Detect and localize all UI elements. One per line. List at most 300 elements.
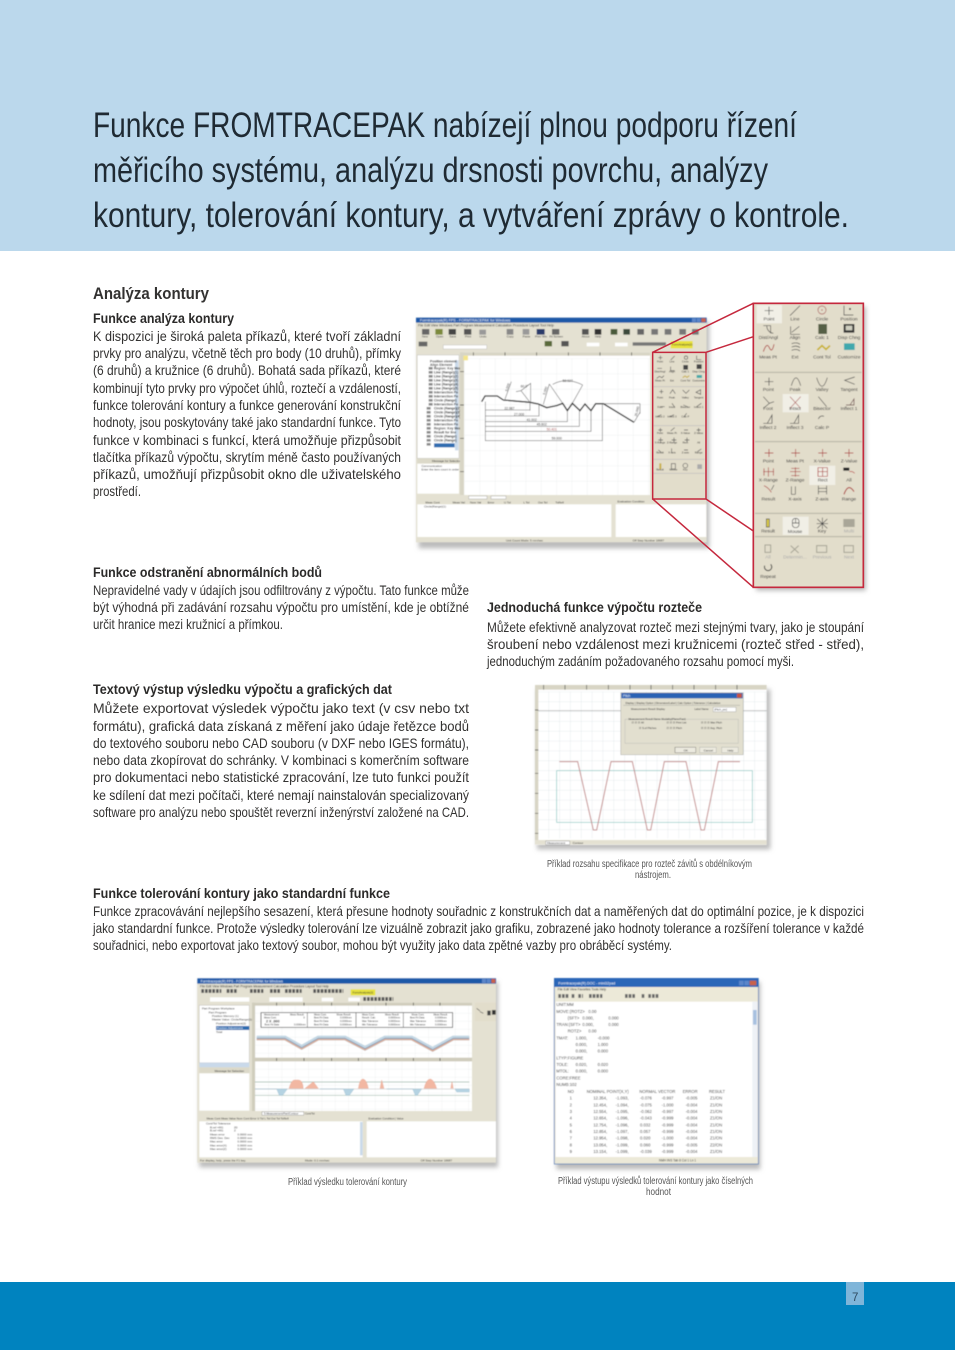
screenshot: contour analysis window: Result for line — [434, 430, 456, 434]
screenshot: contour analysis window: Range — [695, 451, 703, 455]
screenshot: contour analysis window: Print — [465, 335, 471, 339]
screenshot: tolerance result window: B.ref =RG — [210, 1125, 224, 1129]
screenshot: pitch graph with dialog: ☑ ☑ ☑ Print List — [667, 721, 687, 725]
title: měřicího systému, analýzu drsnosti povrchu, analýzy — [93, 151, 768, 190]
screenshot: pitch graph with dialog: Measurement Result Display — [631, 707, 666, 711]
numeric report: MOVE:(ROTZ> — [556, 1009, 585, 1014]
toolbox labels: Foot — [763, 406, 773, 412]
toolbox labels: Result — [761, 528, 775, 534]
numeric report: Z2/ON — [710, 1142, 722, 1147]
screenshot: text output notepad window: NMH INS Tab 8 Col 1 Ln 1 — [659, 1159, 696, 1163]
caption: výstup číselných hodnot — [558, 1175, 753, 1198]
numeric report: -1.097, — [616, 1129, 629, 1134]
screenshot: contour analysis window: Tangent — [694, 395, 704, 399]
text block: Textový výstup: do textového souboru nebo CAD souboru (v DXF nebo IGES formátu), — [93, 736, 469, 751]
numeric report: 6 — [570, 1129, 573, 1134]
screenshot: pitch graph with dialog: [Pitch_pm] — [714, 708, 727, 712]
toolbox labels: Customize — [838, 354, 861, 360]
numeric report: 1.000, — [576, 1035, 587, 1040]
numeric report: -0.999 — [662, 1142, 674, 1147]
toolbox labels: Meas Pt — [786, 458, 805, 464]
screenshot: contour analysis window: Align Element — [430, 363, 453, 367]
screenshot: contour analysis window: Off Step Number 16687 — [633, 538, 664, 542]
numeric report: TRAN:(SFT> — [556, 1022, 581, 1027]
numeric report: 12.854, — [593, 1129, 607, 1134]
numeric report: CORE:FREE — [556, 1075, 581, 1080]
screenshot: contour analysis window: 27.000 — [514, 412, 524, 416]
left tree — [417, 355, 459, 458]
toolbox labels: Rect — [818, 477, 828, 483]
text block: Textový výstup — [93, 682, 469, 820]
text block: Funkce tolerování kontury: Funkce tolerování kontury jako standardní funkce — [93, 886, 390, 901]
text block: Funkce odstranění abnormálních bodů — [93, 565, 469, 632]
screenshot: contour analysis window: Intersection Po — [434, 390, 458, 394]
toolbox labels: Position — [840, 316, 858, 322]
numeric report: TMAT: — [556, 1035, 568, 1040]
screenshot: contour analysis window: 22.987 — [504, 406, 515, 410]
screenshot: contour analysis window: Intsct — [669, 405, 675, 409]
screenshot: tolerance result window: Best Fit Data — [314, 1020, 329, 1023]
toolbox labels: Z-Value — [841, 458, 858, 464]
screenshot: tolerance result window: Max Tolerance — [410, 1020, 427, 1023]
numeric report: -0.004 — [686, 1109, 698, 1114]
text block: Textový výstup: pro dokumentaci nebo statistické zpracování, lze tuto funkci použít — [93, 770, 469, 785]
screenshot: tolerance result window: 0.0000mm — [340, 1020, 352, 1023]
toolbox labels: X-Range — [759, 477, 778, 483]
text block: Jednoduchá funkce výpočtu rozteče — [486, 600, 864, 669]
toolbox labels: Align — [790, 335, 801, 341]
screenshot: tolerance result window: 5-Measurement/Part/Contour — [264, 1112, 299, 1116]
screenshot: pitch graph with dialog: ☑ ☑ ☑ Pitch — [667, 726, 682, 730]
text block: Funkce analýza kontury: prostředí. — [93, 484, 141, 499]
screenshot: contour analysis window: Error — [488, 500, 494, 504]
numeric report: 5 — [570, 1122, 573, 1127]
numeric report: 0.00 — [588, 1009, 597, 1014]
text block: Textový výstup: Textový výstup výsledku výpočtu a grafických dat — [93, 682, 392, 697]
text block: Funkce analýza kontury: příkazů, umožňují přizpůsobit okno dle uživatelského — [93, 467, 401, 482]
screenshot: tolerance result window: Mean error — [210, 1132, 225, 1136]
numeric report: MTOL: — [556, 1069, 569, 1074]
screenshot: contour analysis window: Region: Key Mea — [434, 367, 461, 371]
toolbox labels: All — [846, 477, 852, 483]
screenshot: contour analysis window: Result — [656, 451, 664, 455]
screenshot: contour analysis window: Valley — [682, 395, 690, 399]
screenshot: tolerance result window: Message for Selection — [215, 1069, 245, 1073]
screenshot: contour analysis window: Region: Key Mea — [434, 426, 461, 430]
numeric report: 0.000 — [598, 1049, 609, 1054]
text block: Funkce analýza kontury: tlačítka příkazů výpočtu, skrytím méně často používaných — [93, 450, 401, 465]
numeric report: -1.000 — [662, 1102, 674, 1107]
screenshot: contour analysis window: Position — [694, 360, 704, 364]
numeric report: -0.043 — [640, 1116, 652, 1121]
screenshot: contour analysis window: L Tol — [523, 500, 530, 504]
group 4 icons — [766, 519, 769, 527]
toolbox labels: Point — [763, 316, 775, 322]
dialog — [621, 693, 743, 755]
text block: Funkce odstranění abnormálních bodů: Funkce odstranění abnormálních bodů — [93, 565, 322, 580]
header banner — [0, 0, 955, 251]
screenshot: contour analysis window: Line (Range)(5) — [434, 386, 458, 390]
screenshot: tolerance result window: Meas Result — [433, 1013, 447, 1016]
tab bar — [417, 495, 651, 500]
screenshot: tolerance result window: 0.0000mm — [388, 1017, 400, 1020]
numeric report: -1.095, — [616, 1109, 629, 1114]
screenshot: contour analysis window: Z-Range — [667, 441, 678, 445]
numeric report: 8 — [570, 1142, 573, 1147]
numeric report: -0.004 — [686, 1122, 698, 1127]
screenshot: contour analysis window: Out Tol — [538, 500, 548, 504]
screenshot: tolerance result window: 2 X .000 — [266, 1019, 280, 1023]
numeric report: Z1/ON — [710, 1122, 722, 1127]
screenshot: tolerance result window: 0.0000mm — [388, 1020, 400, 1023]
screenshot: contour analysis window: Message for Selection — [432, 459, 462, 463]
numeric report: 12.754, — [593, 1122, 607, 1127]
numeric report: Z1/ON — [710, 1102, 722, 1107]
screenshot: tolerance result window — [197, 978, 498, 1167]
screenshot: pitch graph with dialog: ☑ S.of Pitches — [639, 726, 657, 730]
screenshot: tolerance result window: 0.0000mm — [294, 1023, 306, 1026]
toolbox labels: Line — [790, 316, 800, 322]
screenshot: contour analysis window: 58.027 — [563, 379, 573, 383]
screenshot: tolerance result window: Cont/Tol Tolerance — [206, 1121, 231, 1125]
text block: Textový výstup: ke sdílení dat mezi počítači, které nemají nainstalován specializovaný — [93, 788, 469, 803]
screenshot: tolerance result window: Min Tolerance — [362, 1023, 378, 1026]
screenshot: tolerance result window: Evaluation Condition | Value — [368, 1117, 404, 1121]
numeric report: NOMINAL POINT(X,Y) — [587, 1089, 629, 1094]
title — [93, 106, 849, 235]
bottom list: Meas Cont Meas Value Nom Cont Error U Tol L Tol Out Tol ToRefl — [207, 1117, 289, 1121]
numeric report: Z1/ON — [710, 1129, 722, 1134]
screenshot: tolerance result window: Z — [234, 1129, 236, 1133]
screenshot: tolerance result window: B.ref =RG — [210, 1129, 224, 1133]
numeric report: -0.039 — [640, 1149, 652, 1154]
screenshot: contour analysis window: Circle (Range)(2) — [434, 406, 461, 410]
screenshot: tolerance result window: Result: Calc — [362, 1017, 376, 1020]
toolbox labels: Mouse — [788, 529, 803, 535]
toolbox labels: Point — [763, 387, 774, 393]
screenshot: contour analysis window: Intersection Po — [434, 418, 458, 422]
numeric report: 0.060 — [640, 1142, 651, 1147]
numeric report: 1.000 — [598, 1042, 609, 1047]
screenshot: contour analysis window: Line (Range)(4) — [434, 382, 458, 386]
numeric report: -0.004 — [686, 1136, 698, 1141]
screenshot: contour analysis window: Meas Val — [453, 500, 465, 504]
screenshot: tolerance result window: Position Adjustment(2) — [216, 1022, 246, 1026]
toolbox labels: Dist/Angl — [759, 335, 778, 341]
numeric report: 0.000, — [576, 1049, 587, 1054]
numeric report: -0.005 — [686, 1142, 698, 1147]
numeric report: 0.020 — [640, 1136, 651, 1141]
toolbox labels: Valley — [816, 387, 829, 393]
numeric report: ROTZ> — [568, 1029, 582, 1034]
screenshot: tolerance result window: Measurement — [264, 1013, 279, 1016]
screenshot: contour analysis window: FormAnalysis(2) — [672, 343, 693, 347]
screenshot: contour analysis window: Circle (Range)(3) — [434, 410, 461, 414]
toolbox labels: Determin... — [783, 555, 807, 561]
text block: Funkce analýza kontury: kombinují tyto prvky pro výpočet úhlů, roztečí a vzdáleností, — [93, 381, 401, 396]
page number — [846, 1282, 864, 1305]
caption: rozteč závitů: Příklad rozsahu specifikace pro rozteč závitů s obdélníkovým — [547, 858, 752, 870]
title: kontury, tolerování kontury, a vytváření zprávy o kontrole. — [93, 196, 849, 235]
toolbox labels: Intsct — [789, 406, 801, 412]
toolbox labels: Calc 1 — [815, 335, 829, 341]
text block: Funkce tolerování kontury — [92, 886, 864, 953]
screenshot: contour analysis window: Copy — [507, 335, 514, 339]
screenshot: contour analysis window: Enter the item count in order — [421, 467, 459, 471]
yellow status label — [671, 341, 693, 348]
screenshot: contour analysis window: Inflect 1 — [694, 405, 704, 409]
toolbox labels: Result — [761, 497, 776, 503]
screenshot: contour analysis window: Open — [436, 335, 444, 339]
screenshot: tolerance result window: 0.0000 mm — [237, 1132, 253, 1136]
screenshot: contour analysis window: Point — [657, 431, 663, 435]
numeric report: 0.000, — [582, 1022, 594, 1027]
screenshot: contour analysis window: Formtracepak(R) FPS - FORMTRACEPAK for Windows — [420, 318, 511, 322]
screenshot: text output notepad window: File Edit View Favorites Tools Help — [558, 988, 606, 992]
numeric report: -0.075 — [640, 1102, 652, 1107]
numeric report: NUMB:102 — [556, 1082, 577, 1087]
toolbox labels: Calc P — [815, 425, 829, 431]
caption: výstup číselných hodnot: Příklad výstupu výsledků tolerování kontury jako číselných — [558, 1175, 753, 1187]
screenshot: tolerance result window: 0.0000mm — [435, 1020, 447, 1023]
text block: Funkce analýza kontury: prvky pro analýzu, včetně těch pro body (10 druhů), přímky — [93, 346, 401, 361]
numeric report: -1.096, — [616, 1122, 629, 1127]
screenshot: pitch graph with dialog: Measurement — [547, 841, 565, 845]
numeric report — [556, 1002, 726, 1154]
screenshot: contour analysis window: Communication — [421, 464, 442, 468]
text block: Funkce odstranění abnormálních bodů: určit hranice mezi kružnicí a přímkou. — [93, 617, 283, 632]
numeric report: (SFT> — [568, 1015, 580, 1020]
screenshot: contour analysis window: 41.002 — [527, 418, 537, 422]
toolbox labels: Repeat — [760, 574, 776, 580]
toolbar — [419, 329, 699, 346]
screenshot: tolerance result window: Max error — [210, 1140, 223, 1144]
screenshot: contour analysis window: Customize — [692, 379, 705, 383]
screenshot: contour analysis window: Position element — [430, 359, 458, 363]
screenshot: contour analysis window: Z-Value — [694, 431, 704, 435]
screenshot: contour analysis window: Inflect 3 — [667, 415, 677, 419]
title: Funkce FROMTRACEPAK nabízejí plnou podporu řízení — [93, 106, 797, 145]
screenshot: tolerance result window: 0.0000mm — [340, 1017, 352, 1020]
screenshot: tolerance result window: Master Value: Circle/Range(1) — [212, 1018, 252, 1022]
group 2 icons — [763, 377, 855, 423]
numeric report: 0.032 — [640, 1122, 651, 1127]
numeric report: Z1/ON — [710, 1136, 722, 1141]
numeric report: 4 — [570, 1116, 573, 1121]
toolbox labels: Circle — [816, 316, 828, 322]
toolbox labels: Ext — [792, 354, 799, 360]
screenshot: contour analysis window: Align — [669, 369, 675, 373]
numeric report: -0.004 — [686, 1129, 698, 1134]
numeric report: -1.094, — [616, 1102, 629, 1107]
text block: Funkce analýza kontury: (6 druhů) a kružnice (6 druhů). Bohatá sada příkazů, které — [93, 363, 401, 378]
screenshot: contour analysis window: Inflect 2 — [655, 415, 665, 419]
screenshot: contour analysis window — [416, 318, 709, 548]
screenshot: tolerance result window: Part Program Workplace — [202, 1006, 235, 1010]
toolbox labels: Inflect 2 — [760, 425, 777, 431]
numeric report: Z1/ON — [710, 1116, 722, 1121]
screenshot: text output notepad window: Formtracepak(R).DOC - mini32pad — [558, 982, 615, 986]
screenshot: tolerance result window: Meas Result — [385, 1013, 399, 1016]
screenshot: pitch graph with dialog: ☑ ☑ ☑ Max Pitch — [701, 721, 723, 725]
screenshot: tolerance result window: Meas Cont. — [314, 1013, 327, 1016]
screenshot: tolerance result window: Best Fit Data — [314, 1017, 329, 1020]
caption: rozteč závitů: nástrojem. — [635, 870, 671, 881]
screenshot: pitch graph with dialog: ☑ ☑ ☑ Avg. Pitch — [701, 726, 723, 730]
screenshot: contour analysis window: Intersection Po — [434, 402, 458, 406]
screenshot: pitch graph with dialog: Label Name — [694, 707, 709, 711]
screenshot: contour analysis window: New — [422, 335, 429, 339]
screenshot: contour analysis window: Circle (Range)(4) — [434, 414, 461, 418]
numeric report: 12.354, — [593, 1096, 607, 1101]
toolbox labels: Previous — [813, 555, 832, 561]
screenshot: contour analysis window: Nom Val — [470, 500, 482, 504]
screenshot: tolerance result window: Mode: 0.1 mm/sec — [305, 1158, 330, 1162]
screenshot: pitch graph with dialog: Contour — [573, 841, 583, 845]
screenshot: contour analysis window: Peak — [669, 395, 676, 399]
screenshot: contour analysis window: Meas Cont — [425, 500, 440, 504]
panel: enlarged toolbox — [753, 303, 863, 587]
screenshot: tolerance result window: FormAnalysis(2) — [353, 991, 373, 995]
numeric report: 13.154, — [593, 1149, 607, 1154]
results table — [261, 1013, 453, 1027]
numeric report: 2 — [570, 1102, 573, 1107]
screenshot: contour analysis window: Ext — [670, 379, 674, 383]
toolbox labels: Cont Tol — [813, 354, 831, 360]
numeric report: -0.999 — [662, 1122, 674, 1127]
screenshot: tolerance result window: Meas Result — [337, 1013, 351, 1016]
canvas — [460, 352, 650, 495]
screenshot: tolerance result window: Z0 — [234, 1125, 238, 1129]
text block: Funkce analýza kontury: Funkce analýza kontury — [93, 311, 234, 326]
screenshot: contour analysis window: Prev Win — [535, 335, 547, 339]
numeric report: -0.999 — [662, 1129, 674, 1134]
screenshot: contour analysis window: Circle — [682, 360, 689, 364]
section heading: Analýza kontury: Analýza kontury — [93, 284, 209, 303]
group 5 icons — [765, 545, 853, 553]
numeric report: -0.000 — [598, 1035, 610, 1040]
screenshot: pitch graph with dialog: Pitch — [623, 694, 631, 698]
toolbox labels: Peak — [789, 387, 801, 393]
screenshot: tolerance result window: Best Fit Data — [410, 1017, 425, 1020]
error graph — [255, 1082, 469, 1095]
screenshot: tolerance result window: 0.0000mm — [340, 1023, 352, 1026]
screenshot: contour analysis window: Calc 1 — [682, 369, 690, 373]
screenshot: tolerance result window: 0.0000mm — [435, 1023, 447, 1026]
screenshot: tolerance result window: Max Tolerance — [362, 1020, 379, 1023]
screenshot: contour analysis window: Point — [657, 360, 663, 364]
screenshot: contour analysis window: Result — [656, 467, 664, 471]
footer band — [0, 1282, 955, 1350]
toolbox labels: Z-axis — [815, 497, 829, 503]
screenshot: contour analysis window: Bisector — [681, 405, 690, 409]
toolbox labels: Z-Range — [786, 477, 805, 483]
numeric report: 0.057 — [640, 1129, 651, 1134]
page number: 7 — [852, 1292, 858, 1304]
screenshot: tolerance result window: Min Tolerance — [410, 1023, 426, 1026]
caption: rozteč závitů — [547, 858, 752, 881]
screenshot: contour analysis window: Unit Count Mode: 5 mm/sec — [506, 538, 543, 542]
screenshot: pitch graph with dialog: ☑ ☑ ☑ All — [632, 721, 644, 725]
toolbox labels: Inflect 3 — [787, 425, 804, 431]
numeric report: 0.000, — [582, 1015, 594, 1020]
toolbox labels: Tangent — [840, 387, 858, 393]
numeric report: -1.099, — [616, 1149, 629, 1154]
screenshot: contour analysis window: Line (Range)(2) — [434, 374, 458, 378]
text block: Funkce odstranění abnormálních bodů: Nepravidelné vady v údajích jsou odfiltrovány z výpočtu. Tato funkce může — [93, 583, 469, 598]
numeric report: 0.000 — [608, 1015, 619, 1020]
screenshot: contour analysis window: Line (Range)(3) — [434, 378, 458, 382]
screenshot: contour analysis window: Disp Chng — [692, 369, 705, 373]
screenshot: tolerance result window: Max error(X) — [210, 1143, 227, 1147]
numeric report: 12.954, — [593, 1136, 607, 1141]
screenshot: contour analysis window: Fit Screen — [549, 335, 563, 339]
text block: Jednoduchá funkce výpočtu rozteče: šroubení nebo vzdálenost mezi kružnicemi (rozteč střed - střed), — [487, 637, 864, 652]
group 3 icons — [763, 449, 853, 477]
screenshot: contour analysis window: 5.000 — [542, 386, 549, 395]
connector lines — [653, 303, 753, 587]
screenshot: contour analysis window: Undo — [479, 335, 487, 339]
screenshot: contour analysis window: Calc P — [681, 415, 689, 419]
screenshot: tolerance result window: 0.0000 mm — [237, 1140, 253, 1144]
numeric report: -1.096, — [616, 1116, 629, 1121]
numeric report: TOLE: — [556, 1062, 568, 1067]
tabs — [252, 1111, 472, 1115]
numeric report: 0.000, — [576, 1042, 587, 1047]
numeric report: -1.000 — [662, 1136, 674, 1141]
screenshot: tolerance result window: Max error(Z) — [210, 1147, 227, 1151]
numeric report: -0.999 — [662, 1149, 674, 1154]
numeric report: Z1/ON — [710, 1096, 722, 1101]
numeric report: 3 — [570, 1109, 573, 1114]
screenshot: tolerance result window: 0.0000 mm — [237, 1147, 253, 1151]
text block: Textový výstup: Můžete exportovat výsledek výpočtu jako text (v csv nebo txt — [93, 701, 469, 716]
screenshot: tolerance result window: Meas Cont. — [412, 1013, 425, 1016]
screenshot: tolerance result window: Cont/Tol — [305, 1112, 315, 1116]
toolbox labels: Key — [818, 528, 827, 534]
screenshot: tolerance result window: 0.0000 mm — [237, 1143, 253, 1147]
screenshot: text output notepad window — [554, 978, 760, 1169]
screenshot: tolerance result window: 0 — [303, 1017, 305, 1020]
numeric report: Z1/ON — [710, 1149, 722, 1154]
screenshot: contour analysis window: Meas Pt — [667, 431, 677, 435]
text block: Funkce odstranění abnormálních bodů: být výhodná při zadávání rozsahu výpočtu pro umístění, kde je obtížné — [93, 600, 469, 615]
toolbox labels: All — [765, 555, 771, 561]
screenshot: contour analysis window: File Edit View Windows Part Program Measurement Calculation Procedure Layout Tool Help — [418, 323, 554, 327]
screenshot: contour analysis window: ToRefl — [555, 500, 564, 504]
toolbox labels: Next — [844, 555, 855, 561]
screenshot: tolerance result window: Formtracepak(R) FPS - FORMTRACEPAK for Windows — [201, 979, 283, 983]
text block: Textový výstup: software pro analýzu nebo spouštět reverzní inženýrství založené na CAD. — [93, 805, 469, 820]
numeric report: 0.020, — [576, 1062, 587, 1067]
numeric report: LTYP:FIGURE — [556, 1055, 584, 1060]
screenshot: contour analysis window: Circle (Range) — [434, 398, 457, 402]
screenshot: tolerance result window: RMS Dev. Dev — [210, 1136, 230, 1140]
screenshot: pitch graph with dialog: Help — [727, 748, 734, 752]
numeric report: ERROR — [683, 1089, 698, 1094]
numeric report: -0.997 — [662, 1096, 674, 1101]
graph panes — [252, 1003, 472, 1111]
group 1 icons — [763, 306, 853, 334]
screenshot: contour analysis window: 59.000 — [552, 437, 562, 441]
screenshot: contour analysis window: Line (Range)(1) — [434, 370, 458, 374]
toolbox labels: X-axis — [788, 497, 802, 503]
screenshot: contour analysis window: Evaluation Condition — [617, 499, 645, 503]
screenshot: contour analysis window: Z-axis — [682, 451, 690, 455]
screenshot: contour analysis window: 35.000 — [634, 406, 640, 417]
numeric report: Z1/ON — [710, 1109, 722, 1114]
numeric report: 7 — [570, 1136, 573, 1141]
